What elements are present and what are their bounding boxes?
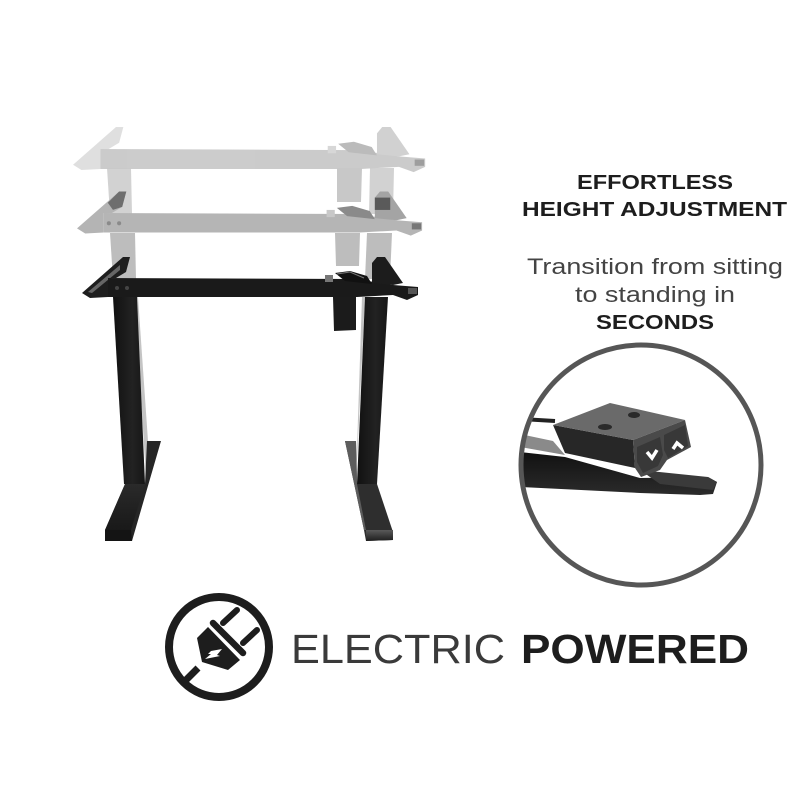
frame: top ghost position: [73, 127, 425, 172]
right foot: [345, 441, 393, 541]
label: electric powered: [291, 626, 749, 672]
heading: effortless height adjustment: [522, 172, 787, 221]
heading: effortless height adjustment: EFFORTLESS: [577, 172, 733, 194]
icon: electric plug: [169, 597, 269, 697]
label: electric powered: POWERED: [521, 626, 749, 672]
label: electric powered: ELECTRIC: [291, 626, 505, 672]
control side: [553, 425, 635, 468]
bracket upper strip: [524, 436, 565, 455]
frame: bottom black position: [82, 257, 418, 300]
description text: SECONDS: [596, 312, 714, 334]
ghost legs: top position: [107, 168, 394, 214]
description text: [527, 254, 783, 334]
right leg with shadow edge: [356, 297, 388, 484]
left leg with shadow edge: [113, 297, 148, 484]
bracket wedge: [520, 452, 717, 495]
description text: Transition from sitting: [527, 254, 783, 279]
arrow up: [673, 443, 683, 449]
description text: to standing in: [575, 282, 735, 307]
control front: [633, 420, 691, 477]
cable: [520, 419, 555, 421]
circular inset: hand control close-up: [520, 345, 761, 585]
arrow down: [647, 450, 657, 458]
actuator box: [333, 297, 356, 331]
frame: middle ghost position: [77, 191, 422, 236]
heading: effortless height adjustment: HEIGHT ADJUSTMENT: [522, 199, 787, 221]
inset ring: [521, 345, 761, 585]
desk frame illustration: [73, 127, 425, 541]
ghost legs: middle position: [110, 233, 392, 279]
control top: [553, 403, 685, 440]
left foot: [105, 441, 161, 541]
